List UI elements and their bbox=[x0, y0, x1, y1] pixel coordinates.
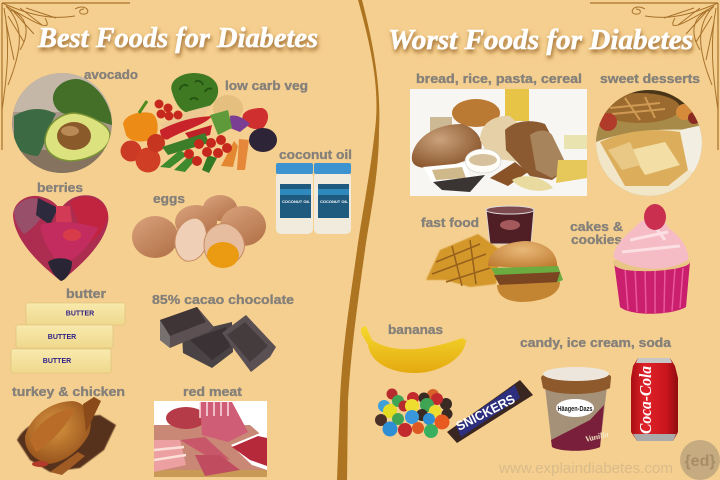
title: worst foods: Worst Foods for Diabetes bbox=[388, 25, 693, 56]
icon: low carb vegetables bbox=[120, 73, 277, 173]
logo: ed bbox=[680, 440, 720, 480]
title: best foods: Best Foods for Diabetes bbox=[37, 23, 318, 54]
label: candy ice cream soda: candy, ice cream, soda bbox=[520, 335, 672, 350]
icon: chocolate pieces bbox=[160, 307, 276, 372]
icon: coconut oil jars: COCONUT OIL bbox=[320, 199, 349, 204]
label: 85% cacao chocolate: 85% cacao chocolate bbox=[152, 292, 294, 307]
label: eggs: eggs bbox=[153, 191, 185, 206]
icon: banana bbox=[361, 326, 466, 373]
icon: fast food bbox=[426, 206, 563, 302]
label: fast food: fast food bbox=[421, 215, 479, 230]
icon: coca-cola can: Coca-Cola bbox=[636, 366, 655, 434]
icon: cupcake bbox=[613, 204, 690, 314]
label: bananas: bananas bbox=[388, 322, 443, 337]
icon: m&m candies bbox=[375, 388, 452, 438]
icon: eggs bbox=[132, 195, 266, 268]
footer url: www.explaindiabetes.com bbox=[498, 460, 673, 477]
icon: ice cream tub bbox=[541, 367, 611, 451]
icon: ice cream tub: Häagen-Dazs bbox=[558, 404, 592, 413]
icon: avocado bbox=[10, 70, 114, 176]
label: coconut oil: coconut oil bbox=[279, 147, 352, 162]
label: avocado: avocado bbox=[84, 67, 138, 82]
icon: ice cream tub: Vanilla bbox=[584, 430, 609, 444]
icon: red meat photo bbox=[154, 401, 267, 477]
central curved divider bbox=[337, 0, 379, 480]
label: cakes & cookies: cakes & bbox=[570, 219, 623, 234]
label: cakes & cookies bbox=[570, 219, 623, 247]
icon: butter sticks bbox=[11, 303, 125, 373]
label: bread rice pasta cereal: bread, rice, pasta, cereal bbox=[416, 71, 582, 86]
icon: butter sticks: BUTTER bbox=[66, 310, 94, 318]
icon: snickers bar: SNICKERS bbox=[454, 391, 518, 434]
icon: roast chicken bbox=[17, 397, 116, 475]
icon: coconut oil jars: COCONUT OIL bbox=[282, 199, 311, 204]
icon: snickers bar bbox=[447, 380, 533, 443]
icon: coconut oil jars bbox=[276, 163, 351, 234]
left corner ornament bbox=[2, 3, 130, 150]
logo: ed: {ed} bbox=[684, 453, 716, 470]
label: sweet desserts: sweet desserts bbox=[600, 71, 700, 86]
image: pie dessert bbox=[596, 88, 702, 196]
icon: butter sticks: BUTTER bbox=[48, 334, 76, 341]
label: turkey & chicken: turkey & chicken bbox=[12, 384, 125, 399]
icon: coca-cola can bbox=[631, 358, 678, 441]
label: low carb veg: low carb veg bbox=[225, 78, 308, 93]
icon: butter sticks: BUTTER bbox=[43, 358, 71, 365]
label: butter: butter bbox=[66, 286, 106, 301]
label: cakes & cookies: cookies bbox=[571, 232, 622, 247]
label: red meat: red meat bbox=[183, 384, 243, 399]
icon: berry heart bbox=[13, 195, 108, 281]
label: berries: berries bbox=[37, 180, 83, 195]
right corner ornament bbox=[590, 3, 718, 150]
image: bread, rice, pasta, cereal bbox=[410, 89, 587, 196]
